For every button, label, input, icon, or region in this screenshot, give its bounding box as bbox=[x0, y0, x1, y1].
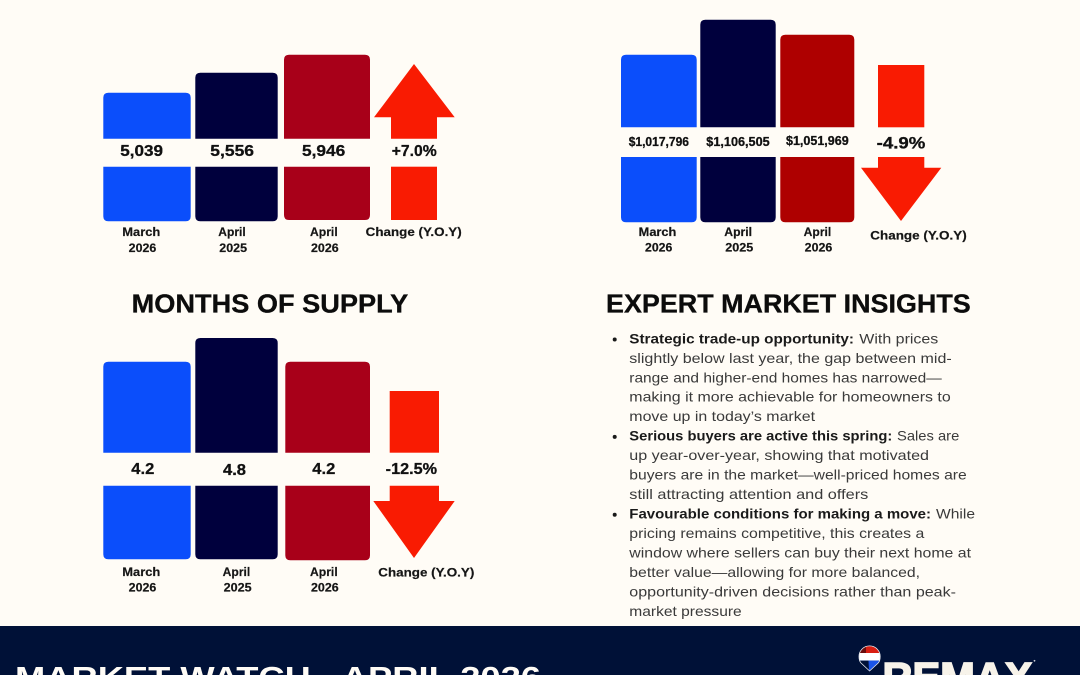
bullet: strategic trade-up: making it more achievable for homeowners to bbox=[629, 389, 951, 405]
axis labels: 2026 bbox=[311, 580, 339, 594]
heading: expert market insights: EXPERT MARKET INSIGHTS bbox=[606, 291, 971, 319]
values: -12.5% bbox=[386, 461, 437, 478]
bar: March 2026 bbox=[103, 93, 191, 221]
axis labels: April bbox=[310, 565, 338, 579]
bullet: strategic trade-up bbox=[613, 330, 952, 424]
axis labels: April bbox=[223, 565, 250, 579]
bullet: serious buyers bbox=[613, 428, 967, 502]
logo: RE/MAX bbox=[858, 645, 1035, 675]
bar: March 2026 bbox=[103, 362, 191, 559]
bar: April 2026 bbox=[284, 55, 370, 220]
chart: top-right price bbox=[621, 20, 967, 254]
values: -4.9% bbox=[877, 134, 926, 152]
chart: months of supply bbox=[103, 338, 474, 594]
bullet: strategic trade-up: Strategic trade-up opportunity: bbox=[629, 330, 854, 346]
values bbox=[131, 461, 437, 479]
bullet: strategic trade-up: move up in today’s market bbox=[629, 408, 815, 424]
text block: insights list bbox=[613, 330, 975, 619]
bullet: favourable conditions: opportunity-driven decisions rather than peak- bbox=[629, 584, 956, 600]
axis labels: March bbox=[639, 225, 676, 239]
values: 4.2 bbox=[131, 461, 154, 478]
axis labels: 2026 bbox=[645, 240, 673, 254]
bullet: favourable conditions: Favourable conditions for making a move: bbox=[629, 506, 931, 522]
bullet: serious buyers: up year-over-year, showing that motivated bbox=[629, 447, 929, 463]
arrow: down change bbox=[861, 65, 941, 221]
bullet: favourable conditions: better value—allowing for more balanced, bbox=[629, 564, 920, 580]
values bbox=[629, 133, 926, 152]
axis labels: 2025 bbox=[224, 580, 252, 594]
values: $1,051,969 bbox=[786, 133, 849, 148]
axis labels: March bbox=[122, 565, 160, 579]
axis labels bbox=[122, 565, 474, 594]
bullet: serious buyers: buyers are in the market—well-priced homes are bbox=[629, 467, 967, 483]
axis labels: 2025 bbox=[219, 241, 247, 255]
icon: balloon bbox=[858, 645, 882, 672]
axis labels: 2026 bbox=[129, 580, 157, 594]
bullet: favourable conditions bbox=[613, 506, 975, 619]
bullet: strategic trade-up: slightly below last year, the gap between mid- bbox=[629, 350, 952, 366]
arrow: up change bbox=[374, 64, 455, 220]
axis labels: Change (Y.O.Y) bbox=[366, 225, 462, 239]
bullet: favourable conditions: window where sellers can buy their next home at bbox=[628, 544, 971, 560]
axis labels: 2025 bbox=[725, 240, 754, 254]
bullet: strategic trade-up: With prices bbox=[859, 330, 938, 346]
bar: April 2025 bbox=[195, 73, 278, 221]
axis labels: April bbox=[804, 225, 831, 239]
values: 5,039 bbox=[120, 143, 163, 160]
axis labels: March bbox=[122, 225, 160, 239]
axis labels: April bbox=[724, 225, 752, 239]
values: 4.2 bbox=[312, 461, 335, 478]
axis labels: Change (Y.O.Y) bbox=[378, 566, 474, 580]
values: 5,946 bbox=[302, 143, 345, 160]
bar: April 2026 bbox=[285, 362, 370, 560]
bullet: favourable conditions: pricing remains competitive, this creates a bbox=[629, 525, 925, 541]
values: $1,106,505 bbox=[706, 134, 770, 149]
axis labels: April bbox=[218, 225, 246, 239]
bullet: serious buyers: Serious buyers are active this spring: bbox=[629, 428, 892, 444]
values: 4.8 bbox=[223, 462, 246, 479]
arrow: down change bbox=[373, 391, 455, 558]
chart: top-left sales bbox=[103, 55, 462, 255]
axis labels: Change (Y.O.Y) bbox=[870, 228, 967, 242]
bullet: strategic trade-up: range and higher-end homes has narrowed— bbox=[629, 369, 942, 385]
bullet: favourable conditions: While bbox=[936, 506, 975, 522]
axis labels: 2026 bbox=[311, 241, 339, 255]
bullet: serious buyers: still attracting attention and offers bbox=[629, 486, 868, 502]
footer band bbox=[0, 626, 1080, 675]
axis labels bbox=[122, 225, 462, 255]
heading: months of supply: MONTHS OF SUPPLY bbox=[132, 291, 408, 319]
bullet: favourable conditions: market pressure bbox=[629, 603, 742, 619]
axis labels bbox=[639, 225, 967, 254]
axis labels: April bbox=[310, 225, 338, 239]
bullet: serious buyers: Sales are bbox=[897, 428, 960, 444]
bar: April 2026 bbox=[780, 35, 854, 222]
axis labels: 2026 bbox=[805, 240, 833, 254]
bar: April 2025 bbox=[700, 20, 776, 222]
values bbox=[120, 143, 437, 160]
axis labels: 2026 bbox=[129, 241, 157, 255]
values: +7.0% bbox=[392, 143, 437, 160]
bar: March 2026 bbox=[621, 55, 697, 222]
values: $1,017,796 bbox=[629, 134, 689, 149]
bar: April 2025 bbox=[195, 338, 278, 559]
values: 5,556 bbox=[210, 143, 254, 160]
